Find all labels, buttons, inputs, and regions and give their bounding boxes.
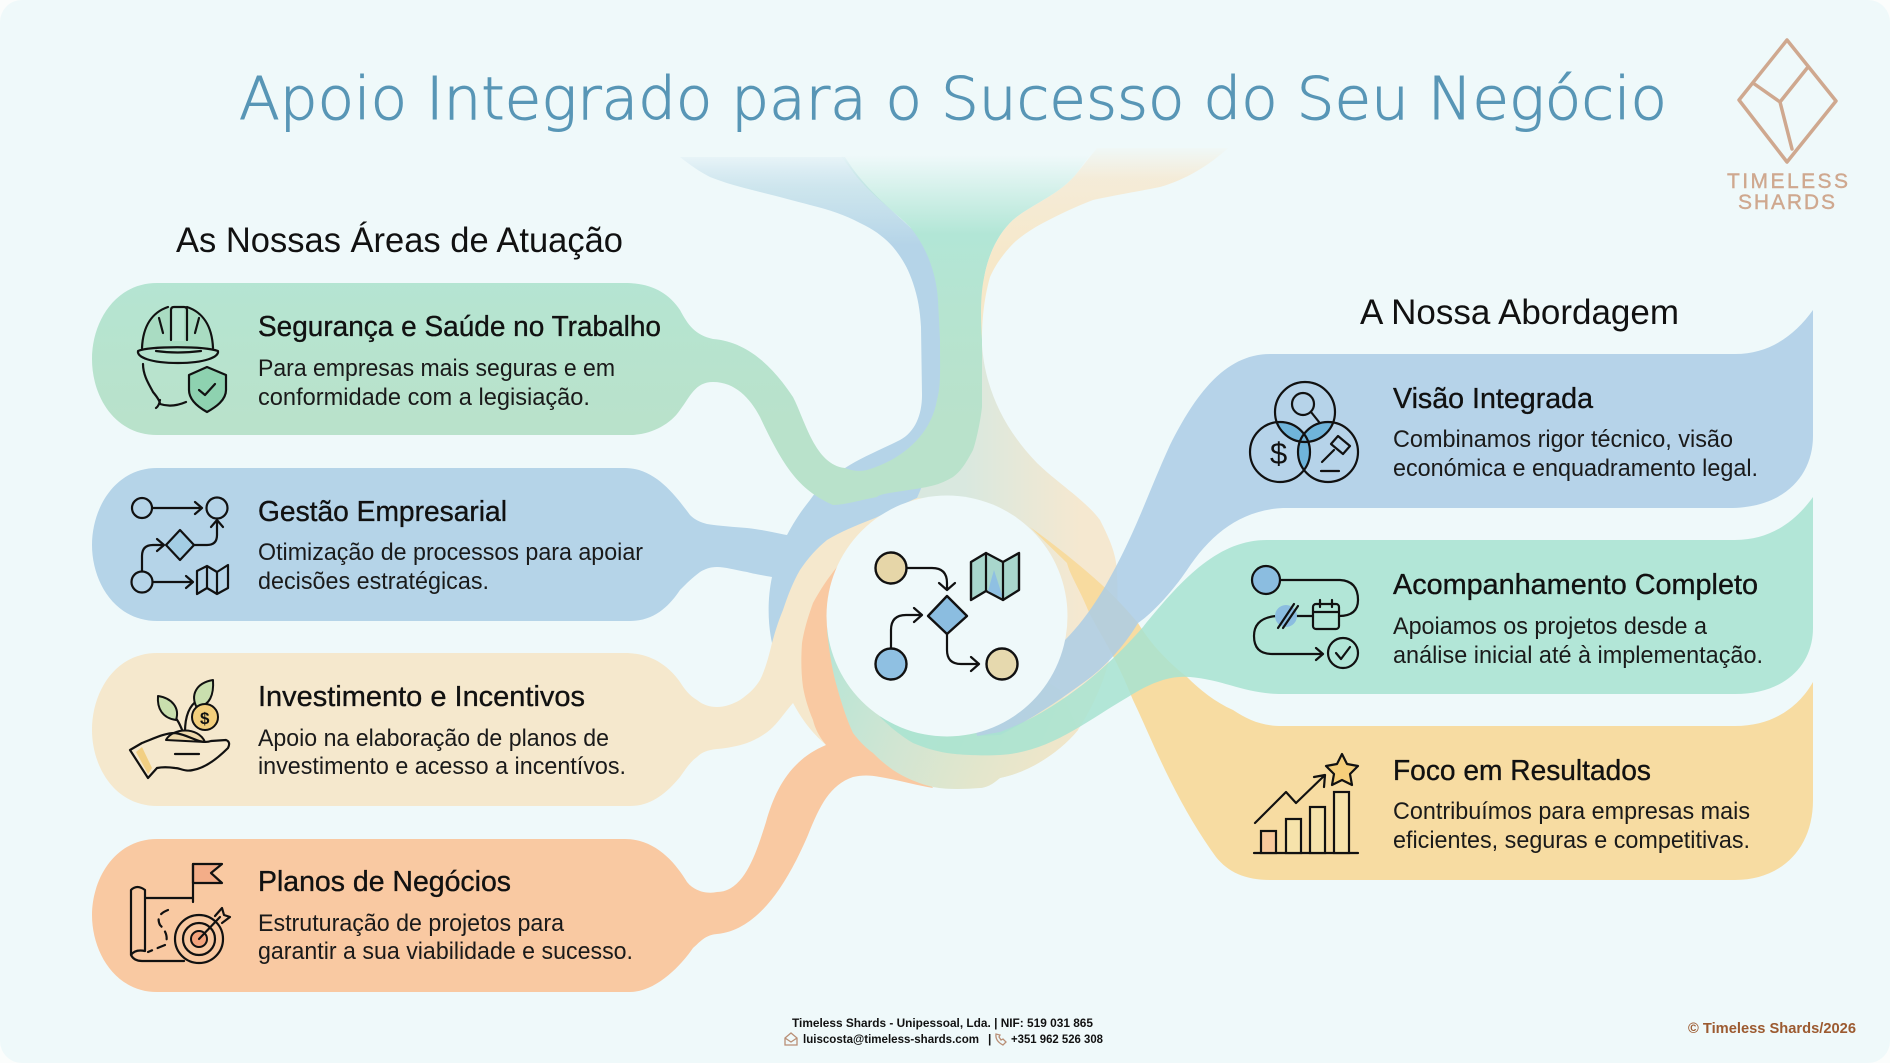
card: Gestão: Gestão Empresarial bbox=[258, 496, 507, 528]
logo: Timeless Shards: SHARDS bbox=[1738, 191, 1835, 214]
logo: Timeless Shards: TIMELESS bbox=[1727, 170, 1848, 193]
card: Visão Integrada bbox=[1250, 382, 1758, 482]
ribbon: pale ring right of the circle bbox=[917, 345, 1118, 788]
panel ribbon: integrated vision bbox=[947, 310, 1813, 736]
icon: growth chart and star bbox=[1254, 754, 1358, 853]
card: Gestão bbox=[132, 496, 643, 595]
card: Visão Integrada: Combinamos rigor técnico, visão bbox=[1393, 426, 1733, 453]
ribbon: management pill and blue stem bbox=[92, 157, 960, 643]
ribbon: pale green ring below the circle bbox=[827, 616, 1078, 789]
ribbon: pale band at top of stem bbox=[981, 148, 1228, 340]
card: Planos bbox=[131, 864, 633, 965]
card: Acompanhamento: Acompanhamento Completo bbox=[1393, 569, 1758, 601]
icon: overlapping circles bbox=[1250, 382, 1358, 482]
footer: contact details: luiscosta@timeless-shards.com bbox=[803, 1032, 979, 1046]
card: Acompanhamento bbox=[1252, 566, 1763, 669]
card: Investimento bbox=[130, 680, 626, 780]
icon: process map bbox=[132, 498, 228, 594]
icon: tracked route bbox=[1252, 566, 1358, 668]
icon: helmet and shield bbox=[138, 306, 226, 412]
ribbon: safety pill and green stem bbox=[92, 155, 1090, 505]
heading: areas: As Nossas Áreas de Atuação bbox=[176, 221, 623, 260]
icon: plant, coin and hand bbox=[130, 680, 229, 778]
card: Segurança: conformidade com a legisiação. bbox=[258, 384, 590, 411]
icon: plant, coin and hand: $ bbox=[200, 709, 210, 728]
footer: contact details: +351 962 526 308 bbox=[1011, 1032, 1103, 1046]
card: Gestão: decisões estratégicas. bbox=[258, 568, 489, 595]
logo: Timeless Shards bbox=[1727, 40, 1848, 214]
card: Investimento: Investimento e Incentivos bbox=[258, 681, 585, 713]
panel ribbon: full follow-up bbox=[880, 497, 1813, 755]
title: Apoio Integrado para o Sucesso do Seu Negócio bbox=[239, 64, 1667, 133]
card: Visão Integrada: Visão Integrada bbox=[1393, 383, 1594, 415]
central circle bbox=[826, 496, 1068, 736]
card: Segurança bbox=[138, 306, 661, 412]
panel ribbon: results bbox=[1030, 527, 1813, 880]
card: Foco: eficientes, seguras e competitivas. bbox=[1393, 827, 1750, 854]
footer: contact details: Timeless Shards - Unipessoal, Lda. | NIF: 519 031 865 bbox=[792, 1016, 1093, 1030]
card: Investimento: Apoio na elaboração de planos de bbox=[258, 725, 609, 752]
card: Acompanhamento: Apoiamos os projetos desde a bbox=[1393, 613, 1708, 640]
icon: phone bbox=[996, 1034, 1006, 1045]
icon: central process flow bbox=[876, 552, 1019, 680]
card: Planos: garantir a sua viabilidade e sucesso. bbox=[258, 938, 633, 965]
card: Segurança: Segurança e Saúde no Trabalho bbox=[258, 311, 661, 343]
ribbon: business plans pill and orange ring bbox=[92, 567, 933, 992]
ribbon: investment pill and beige tail bbox=[92, 498, 950, 806]
icon: map, flag and target bbox=[131, 864, 230, 963]
card: Foco bbox=[1254, 754, 1750, 854]
card: Investimento: investimento e acesso a incentívos. bbox=[258, 753, 626, 780]
icon: email bbox=[785, 1033, 797, 1045]
card: Segurança: Para empresas mais seguras e em bbox=[258, 355, 615, 382]
footer: contact details: | bbox=[988, 1032, 991, 1046]
card: Foco: Contribuímos para empresas mais bbox=[1393, 798, 1750, 825]
footer: contact details bbox=[785, 1016, 1103, 1046]
copyright: © Timeless Shards/2026 bbox=[1688, 1020, 1856, 1037]
card: Visão Integrada: económica e enquadramento legal. bbox=[1393, 455, 1758, 482]
card: Acompanhamento: análise inicial até à implementação. bbox=[1393, 642, 1763, 669]
heading: approach: A Nossa Abordagem bbox=[1360, 293, 1679, 332]
card: Planos: Estruturação de projetos para bbox=[258, 910, 565, 937]
card: Planos: Planos de Negócios bbox=[258, 866, 511, 898]
card: Gestão: Otimização de processos para apoiar bbox=[258, 539, 643, 566]
icon: overlapping circles: $ bbox=[1270, 436, 1287, 471]
card: Foco: Foco em Resultados bbox=[1393, 755, 1651, 787]
